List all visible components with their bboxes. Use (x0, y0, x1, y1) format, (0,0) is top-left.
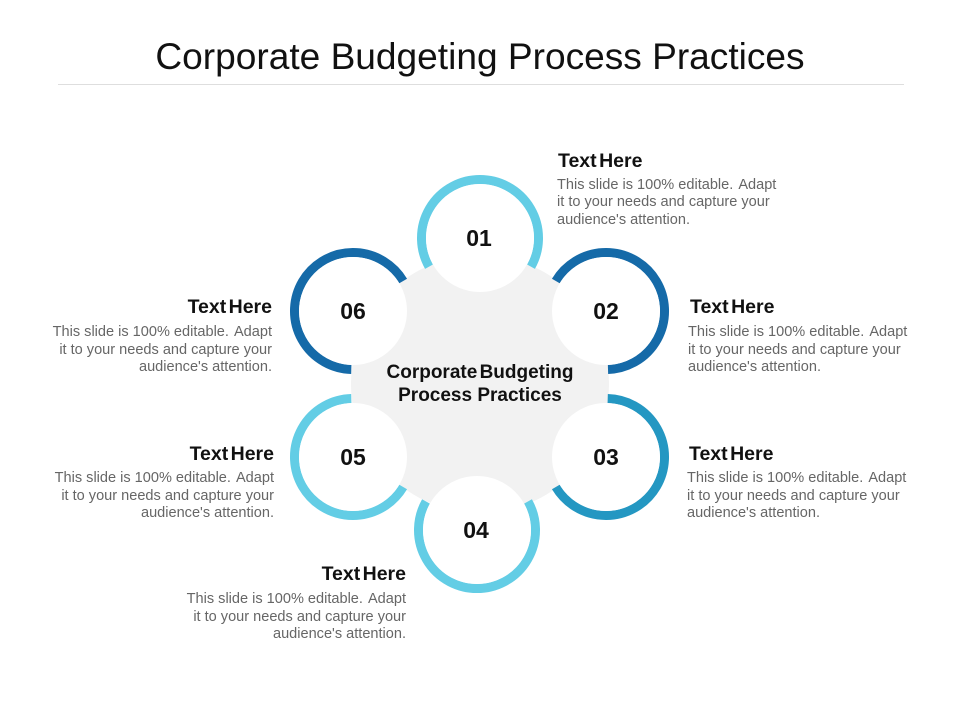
node 04: 04 (463, 517, 489, 543)
title: Corporate Budgeting Process Practices (155, 35, 805, 77)
node 05: 05 (340, 444, 366, 470)
ring 01 (422, 180, 538, 267)
text: This slide is 100% editable. Adapt (53, 324, 272, 340)
node 02 (552, 257, 660, 365)
text block 02 (688, 296, 908, 375)
node 06 (299, 257, 407, 365)
text: audience's attention. (273, 626, 406, 642)
text: This slide is 100% editable. Adapt (55, 470, 274, 486)
center label (386, 362, 574, 406)
text: it to your needs and capture your (193, 608, 406, 624)
text: Text Here (689, 443, 773, 465)
ring 05 (294, 398, 403, 515)
text: audience's attention. (687, 505, 820, 521)
text: Text Here (190, 443, 274, 465)
text block 01 (557, 150, 776, 228)
center label: Process Practices (398, 385, 562, 406)
text: Text Here (188, 296, 272, 318)
ring 02 (556, 253, 665, 369)
text: audience's attention. (139, 359, 272, 375)
text: This slide is 100% editable. Adapt (187, 591, 406, 607)
text: This slide is 100% editable. Adapt (688, 324, 907, 340)
text: audience's attention. (141, 505, 274, 521)
text: it to your needs and capture your (688, 342, 901, 358)
node 05 (299, 403, 407, 511)
node 02: 02 (593, 298, 619, 324)
text block 03 (687, 443, 906, 521)
text: This slide is 100% editable. Adapt (687, 470, 906, 486)
text: This slide is 100% editable. Adapt (557, 176, 776, 192)
text: it to your needs and capture your (687, 488, 900, 504)
node 06: 06 (340, 298, 366, 324)
node 01 (426, 184, 534, 292)
text: audience's attention. (688, 359, 821, 375)
cycle diagram (294, 180, 665, 589)
text: it to your needs and capture your (59, 342, 272, 358)
node 03: 03 (593, 444, 619, 470)
text: it to your needs and capture your (557, 194, 770, 210)
text block 06 (52, 296, 272, 375)
center label: Corporate Budgeting (386, 362, 574, 383)
text: Text Here (322, 563, 406, 585)
node 03 (552, 403, 660, 511)
node 04 (423, 476, 531, 584)
node 01: 01 (466, 225, 492, 251)
ring 06 (294, 253, 403, 370)
text: Text Here (558, 150, 642, 172)
text: audience's attention. (557, 212, 690, 228)
text block 05 (54, 443, 274, 521)
ring 04 (418, 501, 536, 589)
text: Text Here (690, 296, 774, 318)
text: it to your needs and capture your (61, 488, 274, 504)
center circle (351, 255, 609, 513)
ring 03 (556, 398, 665, 515)
text block 04 (186, 563, 406, 642)
